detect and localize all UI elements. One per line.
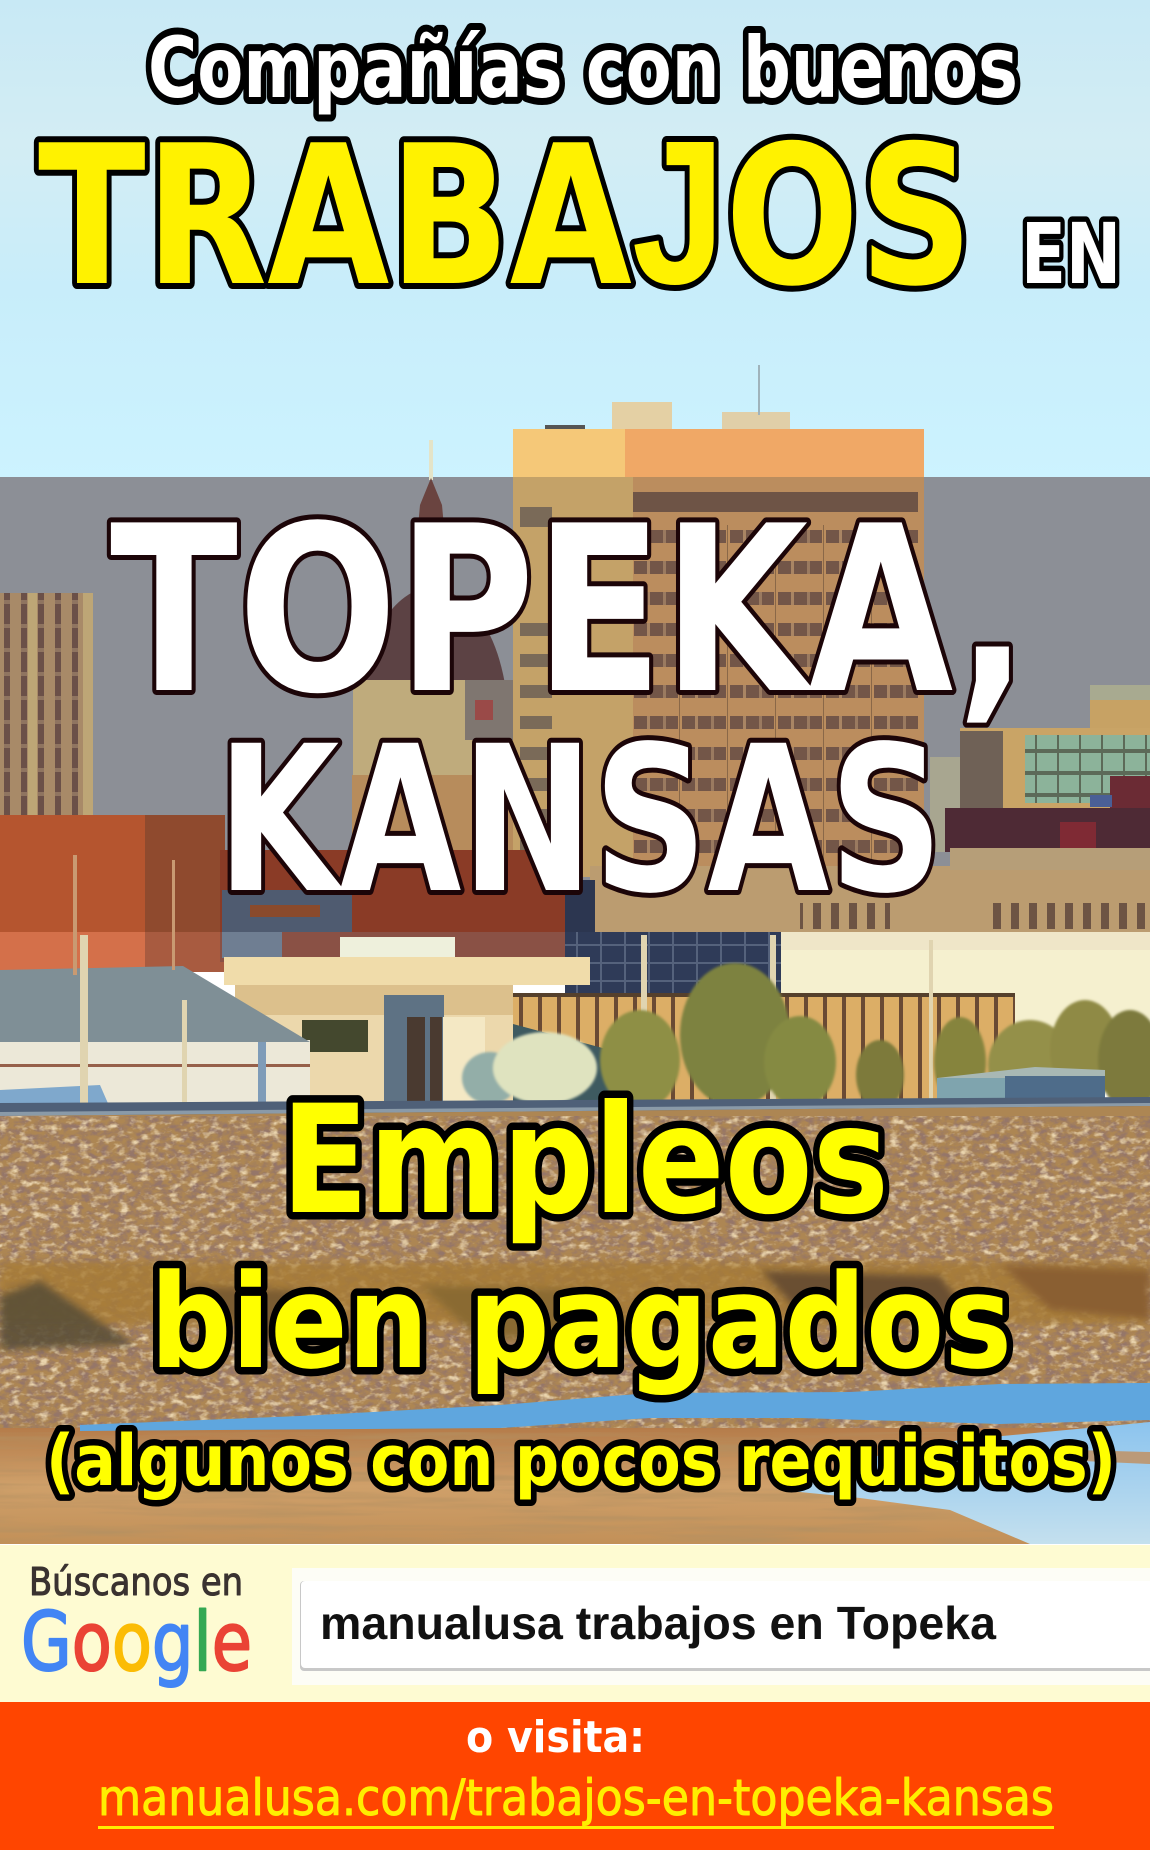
grassy bank	[0, 1262, 1150, 1350]
capitol dome	[352, 440, 513, 865]
search area backdrop	[292, 1568, 1150, 1685]
trees	[462, 963, 1150, 1110]
right side buildings	[590, 685, 1150, 932]
logo: Google: Google	[21, 1596, 252, 1690]
subheading: Empleos: Empleos	[281, 1074, 889, 1248]
subheading: bien pagados: bien pagados	[150, 1246, 1012, 1398]
gravel embankment	[0, 1106, 1150, 1440]
panel: google search	[0, 1545, 1150, 1702]
panel: visit footer	[0, 1702, 1150, 1850]
heading: EN: EN	[1021, 205, 1121, 303]
warehouse	[0, 966, 310, 1110]
guardrail	[0, 1097, 1150, 1116]
search query text: manualusa trabajos en Topeka	[320, 1597, 996, 1649]
heading: KANSAS: KANSAS	[217, 702, 943, 938]
search box	[300, 1581, 1150, 1671]
left tower	[0, 593, 93, 818]
sand bank	[0, 1428, 1150, 1544]
tan sandbar	[1000, 1448, 1150, 1464]
brick buildings	[0, 815, 595, 972]
link: website url: manualusa.com/trabajos-en-topeka-kansas	[98, 1769, 1054, 1827]
river lower channel	[780, 1422, 1150, 1544]
heading: TRABAJOS: TRABAJOS	[38, 98, 973, 329]
lower buildings	[224, 932, 1150, 1105]
label: o visita: o visita:	[466, 1712, 645, 1763]
main tower	[513, 365, 924, 877]
dimmed band	[0, 477, 1150, 932]
utility poles	[73, 855, 933, 1120]
small blue shed	[937, 1067, 1105, 1104]
sky	[0, 0, 1150, 480]
river upper channel	[80, 1383, 1150, 1431]
gravel grain	[0, 1116, 1150, 1436]
label: Búscanos en: Búscanos en	[29, 1560, 243, 1604]
